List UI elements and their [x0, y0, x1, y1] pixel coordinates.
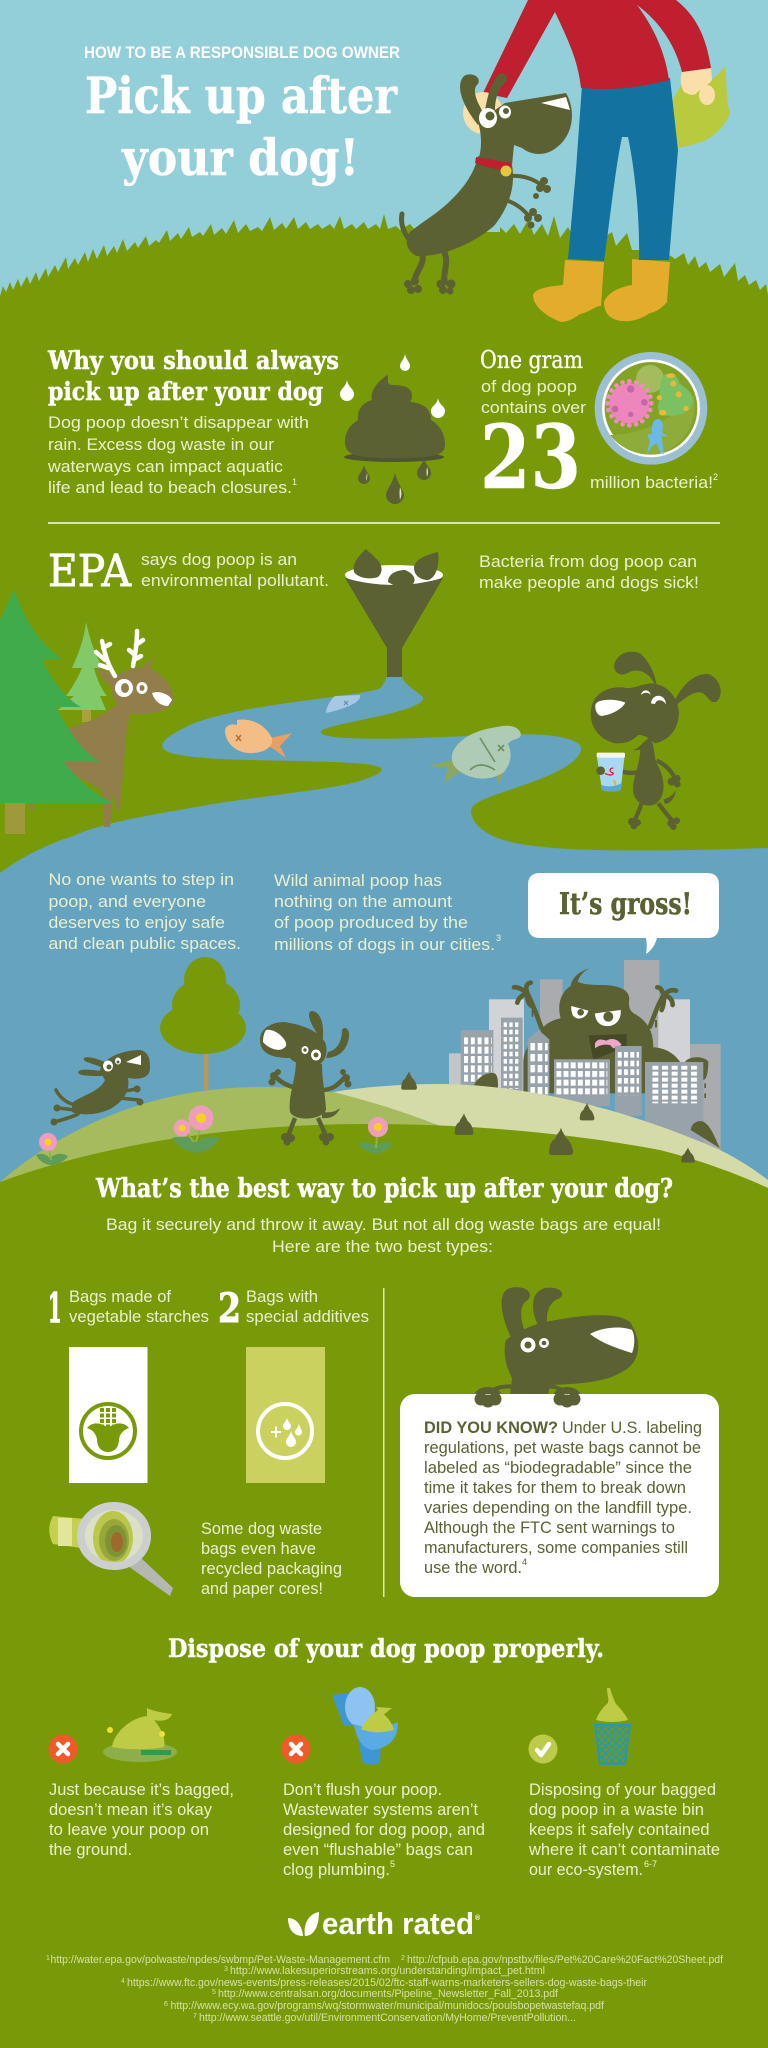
bacteria statement [479, 552, 699, 592]
leaf mark [288, 1918, 303, 1936]
recycled packaging text: Some dog waste [201, 1519, 322, 1538]
bag type 2 [218, 1285, 369, 1483]
bubble text: It’s gross! [559, 887, 692, 922]
sick dog with glass [591, 652, 721, 830]
rim [345, 565, 443, 585]
body and legs [30, 700, 130, 827]
bag type 2: 2 [218, 1285, 241, 1332]
disposal option: toilet: Don’t flush your poop. [283, 1780, 442, 1799]
did you know card with peeking dog: regulations, pet waste bags cannot be [424, 1438, 701, 1457]
why section text: life and lead to beach closures. [48, 478, 292, 497]
jumping dog [402, 73, 572, 295]
lens fill [80, 1505, 148, 1567]
tail [663, 790, 676, 804]
hanging bag [596, 1688, 628, 1722]
footnotes: 4 [121, 1978, 125, 1985]
standing dog [260, 1011, 352, 1146]
wild animal text: of poop produced by the [274, 913, 468, 932]
unit: million bacteria! [590, 473, 713, 492]
monster mouth [589, 1034, 627, 1060]
head [591, 683, 679, 743]
why section text: 1 [292, 477, 297, 487]
did you know card with peeking dog: Under U.S. labeling [562, 1418, 702, 1437]
weed [141, 1750, 171, 1755]
bag type 2: special additives [246, 1307, 369, 1326]
footnotes: http://www.seattle.gov/util/EnvironmentConservation/MyHome/PreventPollution... [199, 2012, 576, 2024]
front buildings [461, 1030, 493, 1093]
boots [533, 259, 670, 322]
did you know card with peeking dog: time it takes for them to break down [424, 1478, 686, 1497]
ears [460, 74, 485, 125]
paws [404, 280, 412, 288]
wild animal text: 3 [496, 933, 501, 943]
did you know card with peeking dog: labeled as “biodegradable” since the [424, 1458, 692, 1477]
footnotes: http://cfpub.epa.gov/npstbx/files/Pet%20Care%20Fact%20Sheet.pdf [407, 1954, 724, 1966]
grass patch [103, 1742, 177, 1762]
monster body [523, 968, 680, 1093]
running dog [50, 1050, 150, 1126]
disposal option: waste bin: where it can’t contaminate [528, 1840, 720, 1859]
small tree [58, 622, 107, 722]
sky background [0, 0, 768, 340]
earth rated logo [288, 1906, 481, 1941]
ears [78, 1057, 105, 1076]
roll [49, 1516, 95, 1550]
white bag [69, 1347, 148, 1483]
disposal option: ground: the ground. [49, 1840, 132, 1859]
poop chunks [354, 549, 382, 578]
did you know card with peeking dog: 4 [522, 1557, 527, 1567]
recycled packaging text [201, 1519, 342, 1598]
wild animal text: Wild animal poop has [274, 871, 442, 890]
big pine tree [0, 589, 113, 834]
paws [474, 1387, 502, 1407]
disposal option: toilet: Wastewater systems aren’t [283, 1800, 478, 1819]
EPA mark: EPA [48, 546, 132, 597]
disposal option: toilet: designed for dog poop, and [283, 1820, 485, 1839]
poop monster city [449, 960, 721, 1154]
nose and eyes [263, 1030, 286, 1050]
disposal option: waste bin: keeps it safely contained [529, 1820, 710, 1839]
bag in toilet [361, 1710, 394, 1732]
EPA statement [48, 546, 329, 597]
text: Just because it’s bagged, [49, 1780, 234, 1799]
disposal option: ground: doesn’t mean it’s okay [49, 1800, 212, 1819]
label: Bags made of [69, 1287, 171, 1306]
monster drips [532, 1010, 657, 1027]
stat: 23 million bacteria: contains over [481, 398, 586, 417]
section heading: dispose: Dispose of your dog poop properly. [168, 1634, 604, 1663]
wild animal text [274, 871, 501, 954]
eyes [520, 1338, 536, 1352]
ears [309, 1011, 349, 1058]
footnotes: 6 [164, 2001, 168, 2008]
toilet [332, 1693, 360, 1726]
footnotes: http://www.ecy.wa.gov/programs/wq/stormwater/municipal/munidocs/poulsbopetwastefaq.pdf [170, 2000, 605, 2012]
body [407, 156, 513, 256]
wild animal text: millions of dogs in our cities. [274, 935, 495, 954]
deer [30, 631, 174, 827]
did you know card with peeking dog: Although the FTC sent warnings to [424, 1518, 675, 1537]
head [100, 1050, 150, 1082]
EPA statement: environmental pollutant. [141, 571, 329, 590]
recycled packaging text: and paper cores! [201, 1579, 323, 1598]
icon: petri dish with germs [598, 356, 704, 461]
antlers [96, 631, 143, 676]
why section text: waterways can impact aquatic [47, 457, 284, 476]
blue trousers [568, 78, 678, 261]
paragraph: Dog poop doesn’t disappear with [48, 413, 309, 432]
ears [614, 652, 657, 685]
head [478, 93, 572, 165]
headline line 2: your dog! [121, 128, 359, 187]
right hand [681, 68, 712, 95]
footnotes [46, 1954, 724, 2024]
recycled packaging text: recycled packaging [201, 1559, 342, 1578]
funnel [345, 578, 443, 677]
footnotes: 5 [212, 1989, 216, 1996]
section heading: best way: Here are the two best types: [272, 1237, 493, 1256]
footnotes: http://www.centralsan.org/documents/Pipeline_Newsletter_Fall_2013.pdf [218, 1988, 559, 2000]
limbs [622, 761, 675, 822]
disposal option: waste bin: 6-7 [644, 1859, 657, 1869]
why section text [47, 346, 339, 497]
back left hill [0, 1087, 440, 1190]
park hills [0, 1084, 768, 1230]
magnifier handle [128, 1558, 173, 1596]
head [505, 1315, 638, 1396]
bag type 1: 1 [48, 1285, 62, 1332]
tag [500, 166, 512, 176]
footnotes: 2 [401, 1955, 405, 1962]
paws [270, 1072, 278, 1080]
eyes [115, 679, 133, 697]
people and spaces text: deserves to enjoy safe [48, 913, 225, 932]
paw tips on card [474, 1392, 580, 1408]
heading: Why you should always [47, 346, 339, 375]
x badge [48, 1734, 78, 1764]
yellow-green bag [246, 1347, 325, 1483]
icon: bag roll under magnifier [49, 1505, 173, 1596]
nose [152, 692, 172, 706]
recycled packaging text: bags even have [201, 1539, 316, 1558]
stat: 23 million bacteria: 2 [713, 472, 718, 482]
footnotes: http://water.epa.gov/polwaste/npdes/swbmp/Pet-Waste-Management.cfm [50, 1954, 390, 1966]
paws [668, 778, 676, 786]
green germ [658, 374, 693, 416]
front hill [0, 1124, 768, 1230]
bag type 2: Bags with [246, 1287, 318, 1306]
nose [590, 1327, 634, 1353]
disposal option: toilet: even “flushable” bags can [283, 1840, 473, 1859]
body [72, 1078, 128, 1114]
nose [541, 97, 570, 110]
poop pile [345, 375, 445, 458]
wild animal text: nothing on the amount [274, 892, 452, 911]
paw on glass [596, 766, 605, 775]
person: dog owner with bag [463, 0, 730, 322]
nose [595, 700, 625, 716]
tail and legs [402, 214, 414, 245]
card [400, 1394, 719, 1597]
head [112, 668, 174, 714]
big number: 23 [480, 405, 581, 509]
back right hill [333, 1084, 768, 1210]
large poop lumps [474, 1073, 498, 1088]
headline line 1: Pick up after [85, 66, 398, 125]
magnifier lens [81, 1506, 147, 1566]
park tree [160, 957, 246, 1090]
flowers [36, 1107, 393, 1165]
footnotes: 1 [46, 1955, 50, 1962]
did you know card with peeking dog: manufacturers, some companies still [424, 1538, 688, 1557]
did you know card with peeking dog: varies depending on the landfill type. [424, 1498, 692, 1517]
small blue fish [326, 695, 360, 713]
big green fish [428, 726, 521, 784]
people and spaces text: poop, and everyone [48, 892, 206, 911]
body [290, 1060, 326, 1119]
bag type 1 [48, 1285, 209, 1483]
footnotes: 7 [193, 2013, 197, 2020]
yellow flowers [107, 1727, 113, 1733]
did you know card with peeking dog: use the word. [424, 1558, 522, 1577]
collar [475, 157, 511, 171]
kicker: HOW TO BE A RESPONSIBLE DOG OWNER [84, 44, 400, 62]
paws [54, 1104, 60, 1112]
disposal option: ground [48, 1708, 234, 1859]
section heading: best way [95, 1174, 673, 1256]
did you know card with peeking dog [400, 1287, 719, 1597]
footnotes: https://www.ftc.gov/news-events/press-releases/2015/02/ftc-staff-warns-marketers-sellers-dog-waste-bags-their [127, 1977, 647, 1989]
divider [48, 522, 720, 524]
nose and eyes [126, 1055, 141, 1065]
card text: DID YOU KNOW? [424, 1418, 558, 1437]
wordmark: earth rated [322, 1906, 474, 1941]
dish [598, 356, 704, 461]
head [260, 1022, 327, 1065]
icon: poop with drips [340, 354, 445, 504]
tail [322, 1108, 340, 1118]
stat: 23 million bacteria [480, 346, 718, 509]
disposal option: waste bin [528, 1688, 720, 1879]
disposal option: ground: to leave your poop on [49, 1820, 209, 1839]
body [633, 738, 664, 806]
monster hand behind last building [685, 1057, 708, 1080]
why section text: pick up after your dog [48, 377, 323, 406]
title block [84, 44, 400, 187]
worm [605, 768, 613, 775]
people and spaces text: and clean public spaces. [48, 934, 241, 953]
back buildings [489, 999, 524, 1096]
monster arms [514, 983, 676, 1028]
footnotes: http://www.lakesuperiorstreams.org/understanding/impact_pet.html [230, 1965, 545, 1977]
people and spaces text: No one wants to step in [48, 870, 234, 889]
orange fish [225, 720, 292, 758]
bag held in hand [659, 66, 730, 150]
vertical divider [383, 1288, 384, 1597]
light area [610, 395, 695, 455]
stat: 23 million bacteria: of dog poop [481, 377, 577, 396]
blue germ [647, 419, 668, 454]
speech bubble [528, 873, 719, 954]
disposal option: waste bin: dog poop in a waste bin [529, 1800, 704, 1819]
why section text: rain. Excess dog waste in our [48, 435, 274, 454]
peeking dog [474, 1287, 638, 1407]
people and spaces text [48, 870, 241, 953]
section heading: best way: What’s the best way to pick up after your dog? [95, 1174, 673, 1204]
green background: upper section [0, 320, 768, 920]
left hand [463, 92, 503, 134]
disposal option: waste bin: our eco-system. [529, 1860, 643, 1879]
bacteria statement: Bacteria from dog poop can [479, 552, 697, 571]
subheading: Bag it securely and throw it away. But not all dog waste bags are equal! [106, 1215, 661, 1234]
disposal option: toilet: clog plumbing. [283, 1860, 390, 1879]
footnotes: 3 [224, 1966, 228, 1973]
grass hill [0, 214, 768, 340]
tail and legs [54, 1089, 139, 1122]
disposal option: toilet [282, 1687, 485, 1879]
icon: funnel with poop [345, 549, 443, 677]
eyes [479, 108, 497, 128]
eyes [641, 690, 651, 695]
white rain drops [400, 354, 410, 371]
roll face [93, 1511, 133, 1565]
ears [96, 655, 155, 688]
red shirt [483, 0, 711, 98]
puddle [344, 452, 444, 462]
monster eyes [571, 1006, 588, 1019]
glass [597, 755, 625, 792]
bag on ground [112, 1708, 172, 1749]
pink germ [607, 381, 651, 425]
earth rated logo: ® [475, 1914, 481, 1922]
river [0, 677, 768, 1200]
icon: additives drops [258, 1404, 312, 1458]
intro lines: One gram [480, 346, 583, 374]
disposal option: toilet: 5 [390, 1859, 395, 1869]
bin [595, 1725, 630, 1764]
drips [358, 465, 370, 484]
lower green background [0, 1205, 768, 2048]
ears [502, 1287, 530, 1340]
disposal option: waste bin: Disposing of your bagged [529, 1780, 716, 1799]
bacteria statement: make people and dogs sick! [479, 573, 699, 592]
bag type 1: vegetable starches [69, 1307, 209, 1326]
icon: corn [81, 1404, 135, 1458]
text: says dog poop is an [141, 550, 297, 569]
scattered poops [401, 1071, 695, 1163]
limbs [275, 1076, 344, 1136]
